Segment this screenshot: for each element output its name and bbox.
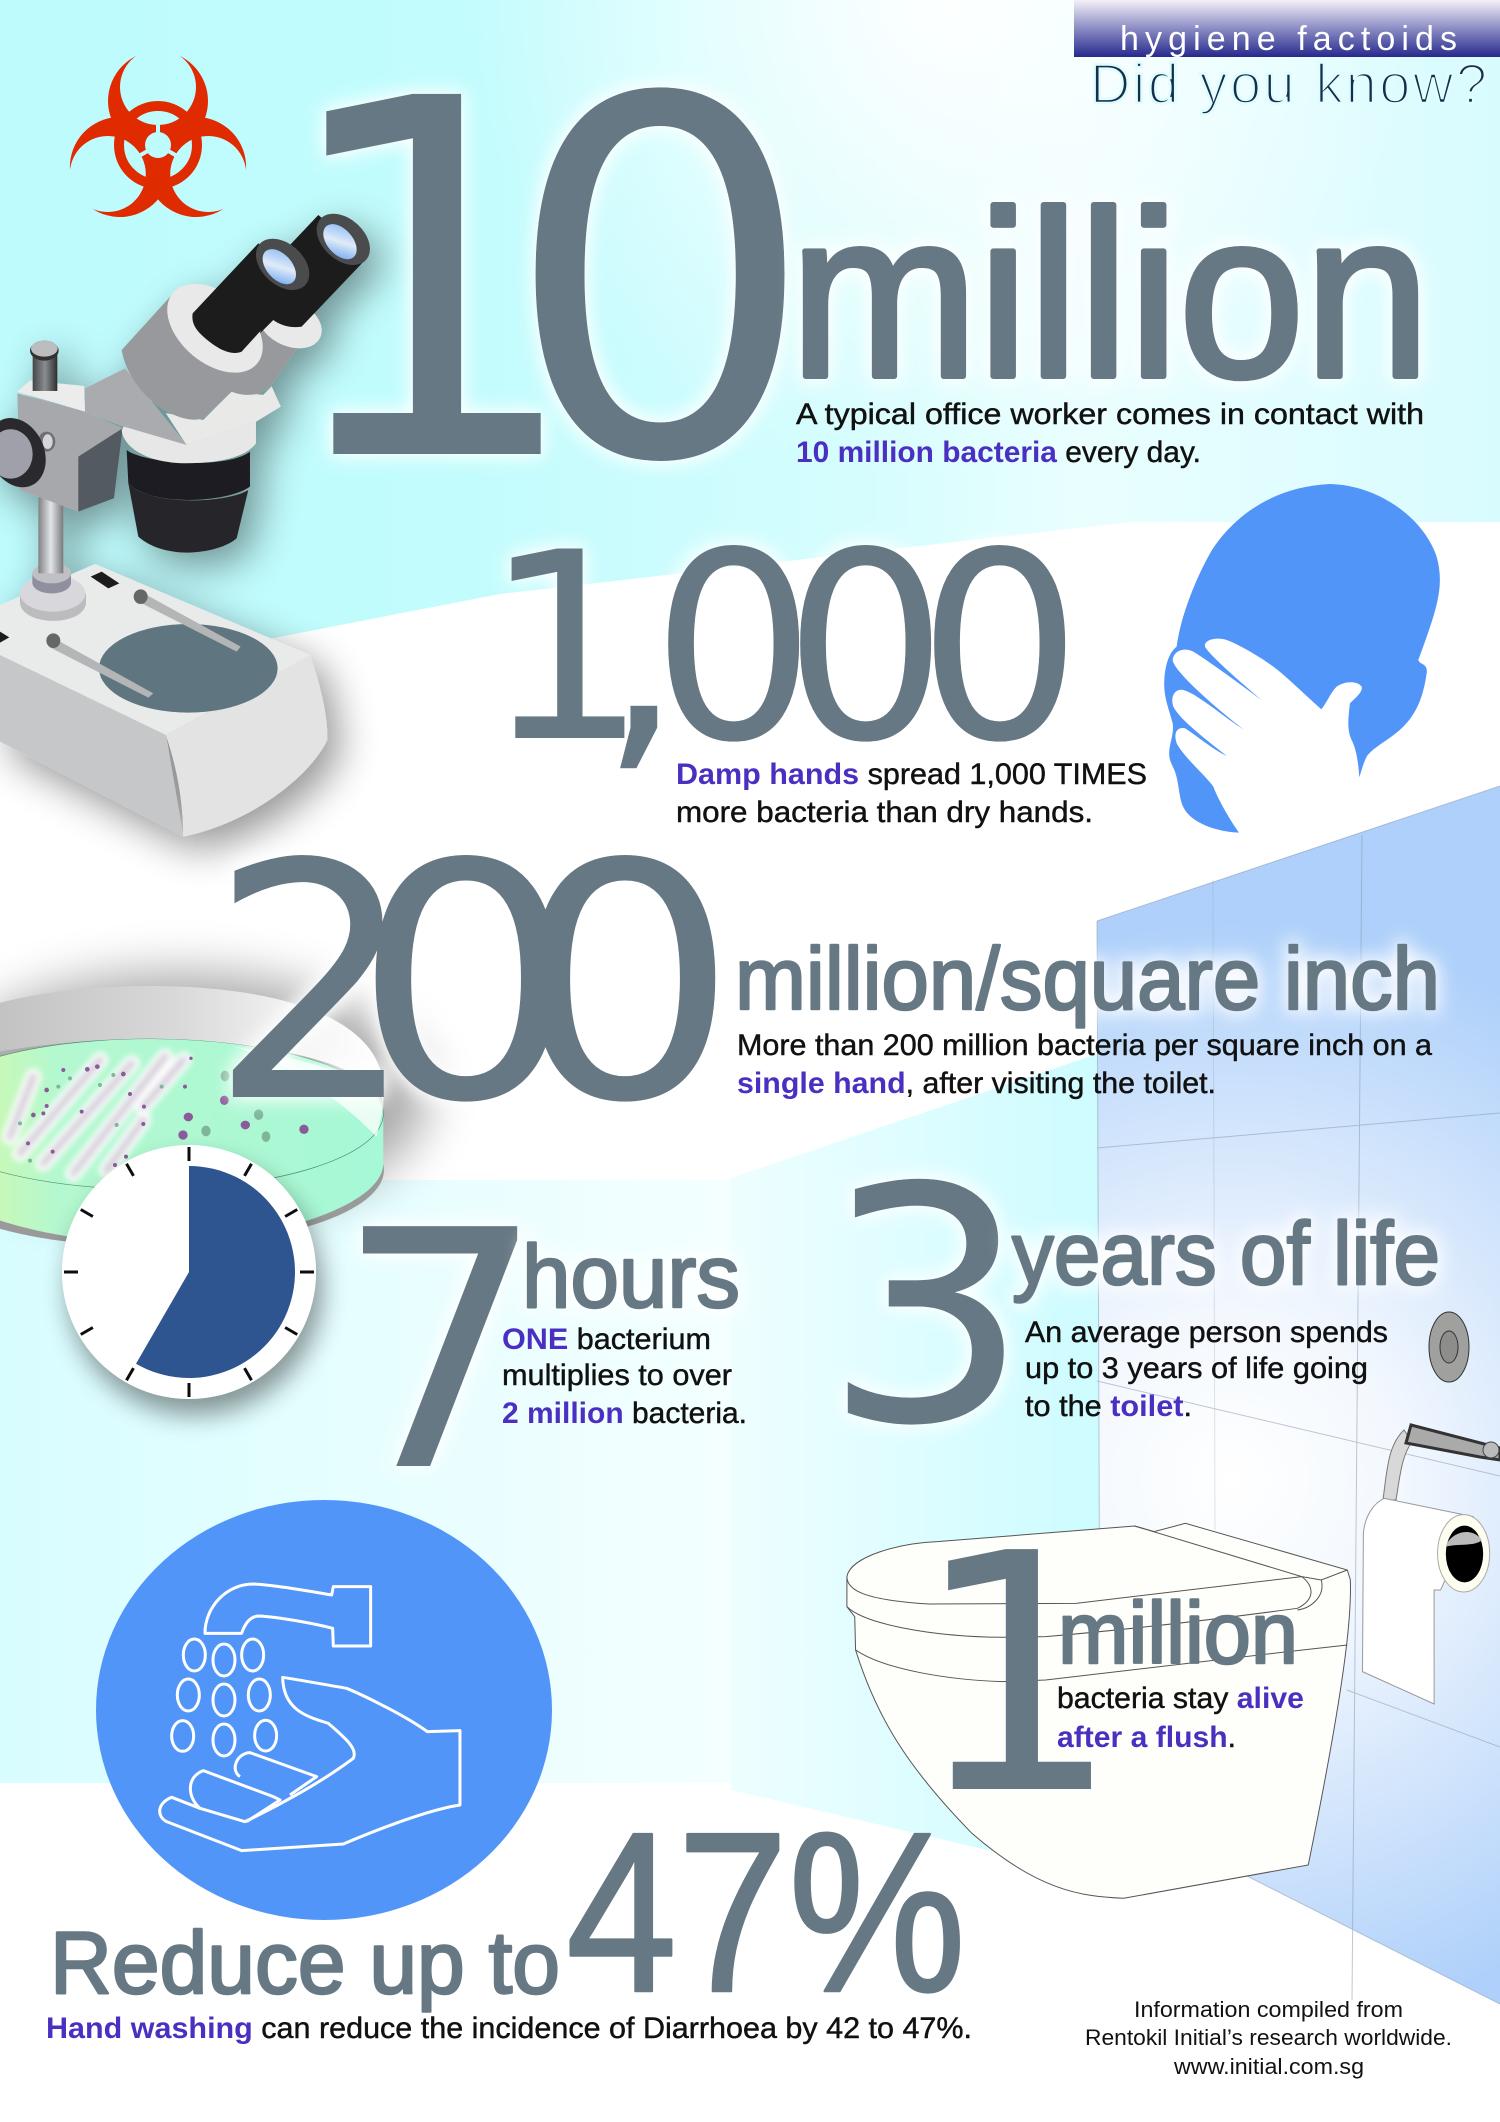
caption: single hand: single hand, after visiting the toilet. [737, 1067, 1216, 1100]
bathroom wall with tiles [1097, 786, 1500, 2004]
microscope base [0, 563, 327, 837]
caption: damp hands: more bacteria than dry hands. [676, 796, 1093, 829]
big number 10: 10 [272, 0, 817, 571]
big number 1: 1 [912, 1484, 1121, 1867]
heading: million: million [1058, 1585, 1298, 1682]
microscope head [122, 295, 320, 420]
caption: damp hands: Damp hands spread 1,000 TIMES [676, 758, 1147, 791]
caption: single hand [737, 1029, 1432, 1100]
source credit: Rentokil Initial’s research worldwide. [1085, 2025, 1452, 2050]
text block: 3 years of life [823, 1118, 1440, 1497]
text block: 7 hours [336, 1161, 747, 1544]
clock 7 hour pie sector [136, 1166, 295, 1378]
header banner: hygiene factoids: hygiene factoids [1120, 20, 1457, 58]
caption: alive after a flush: after a flush. [1057, 1721, 1236, 1754]
paper sheet [1362, 1498, 1473, 1704]
bacteria colonies [18, 1057, 309, 1167]
big number 200: 2 [209, 794, 416, 1174]
microscope column [38, 483, 63, 573]
faucet, water drops and hand outline [160, 1584, 460, 1851]
roll end [1438, 1515, 1490, 1592]
source credit [1085, 1997, 1452, 2079]
icon: flush button [1429, 1312, 1469, 1382]
caption: alive after a flush [1057, 1682, 1304, 1754]
text block: 10 million [272, 0, 1430, 571]
icon: clock showing 7 hours [62, 1145, 316, 1399]
big number 47%: 47% [566, 1786, 966, 2040]
big number 3: 3 [823, 1118, 1030, 1497]
caption: one bacterium: 2 million bacteria. [502, 1397, 747, 1430]
petri dish lid [0, 986, 383, 1137]
microscope objective [127, 450, 250, 553]
illustration: toilet bowl [847, 1523, 1350, 1898]
text block: reduce up to 47% [46, 1786, 972, 2045]
caption: office worker [796, 398, 1424, 469]
header banner: hygiene factoids [1074, 0, 1500, 58]
focus knob [0, 408, 57, 497]
big number 7: 7 [336, 1161, 545, 1544]
clock tick marks [64, 1147, 314, 1397]
icon: head with hand over face [1164, 484, 1440, 833]
caption: one bacterium: multiplies to over [502, 1359, 732, 1392]
caption: going to the toilet [1025, 1316, 1388, 1423]
big number 200: 00 [352, 794, 739, 1174]
header: Did you know?: Did you know? [1090, 52, 1487, 115]
text block: 1,000 [483, 498, 1147, 829]
caption: office worker: A typical office worker comes in contact with [796, 398, 1424, 431]
source credit: www.initial.com.sg [1173, 2054, 1364, 2079]
illustration: toilet paper roll and holder [1362, 1425, 1500, 1704]
petri dish shadow [0, 973, 427, 1220]
caption: alive after a flush: bacteria stay alive [1057, 1682, 1304, 1715]
text block: million/square inch [735, 929, 1440, 1100]
holder [1383, 1425, 1500, 1500]
eyepiece tubes [192, 215, 368, 353]
heading: Reduce up to: Reduce up to [50, 1913, 560, 2012]
illustration: microscope [0, 203, 380, 837]
caption: hand washing: Hand washing can reduce the incidence of Diarrhoea by 42 to 47%. [46, 2012, 972, 2045]
microscope arm [85, 368, 187, 445]
caption: going to the toilet: up to 3 years of life going [1025, 1352, 1368, 1385]
big number 1,000: 1,000 [483, 498, 1082, 800]
focus block with post [17, 341, 123, 512]
caption: going to the toilet: to the toilet. [1025, 1390, 1192, 1423]
bacteria streaks [10, 1057, 183, 1173]
source credit: Information compiled from [1134, 1997, 1403, 2022]
eyepiece lenses [246, 203, 380, 300]
caption: one bacterium: ONE bacterium [502, 1323, 711, 1356]
caption: going to the toilet: An average person spends [1025, 1316, 1388, 1349]
heading: million/square inch: million/square inch [735, 929, 1440, 1028]
agar side and surface [0, 1039, 383, 1243]
column collar [20, 563, 86, 621]
heading: hours: hours [522, 1226, 740, 1326]
caption: damp hands [676, 758, 1147, 829]
icon: hand washing circle [96, 1500, 552, 1920]
caption: office worker: 10 million bacteria every day. [796, 436, 1201, 469]
eyepiece collars [150, 266, 330, 390]
objective collar and plate [122, 387, 281, 463]
illustration: petri dish [0, 973, 427, 1247]
caption: one bacterium [502, 1323, 747, 1430]
heading: million: million [790, 163, 1430, 427]
icon: biohazard symbol [70, 56, 246, 217]
text block: 1 million [912, 1484, 1304, 1867]
heading: years of life: years of life [1012, 1203, 1440, 1303]
stage clips [46, 589, 241, 698]
caption: single hand: More than 200 million bacteria per square inch on a [737, 1029, 1432, 1062]
